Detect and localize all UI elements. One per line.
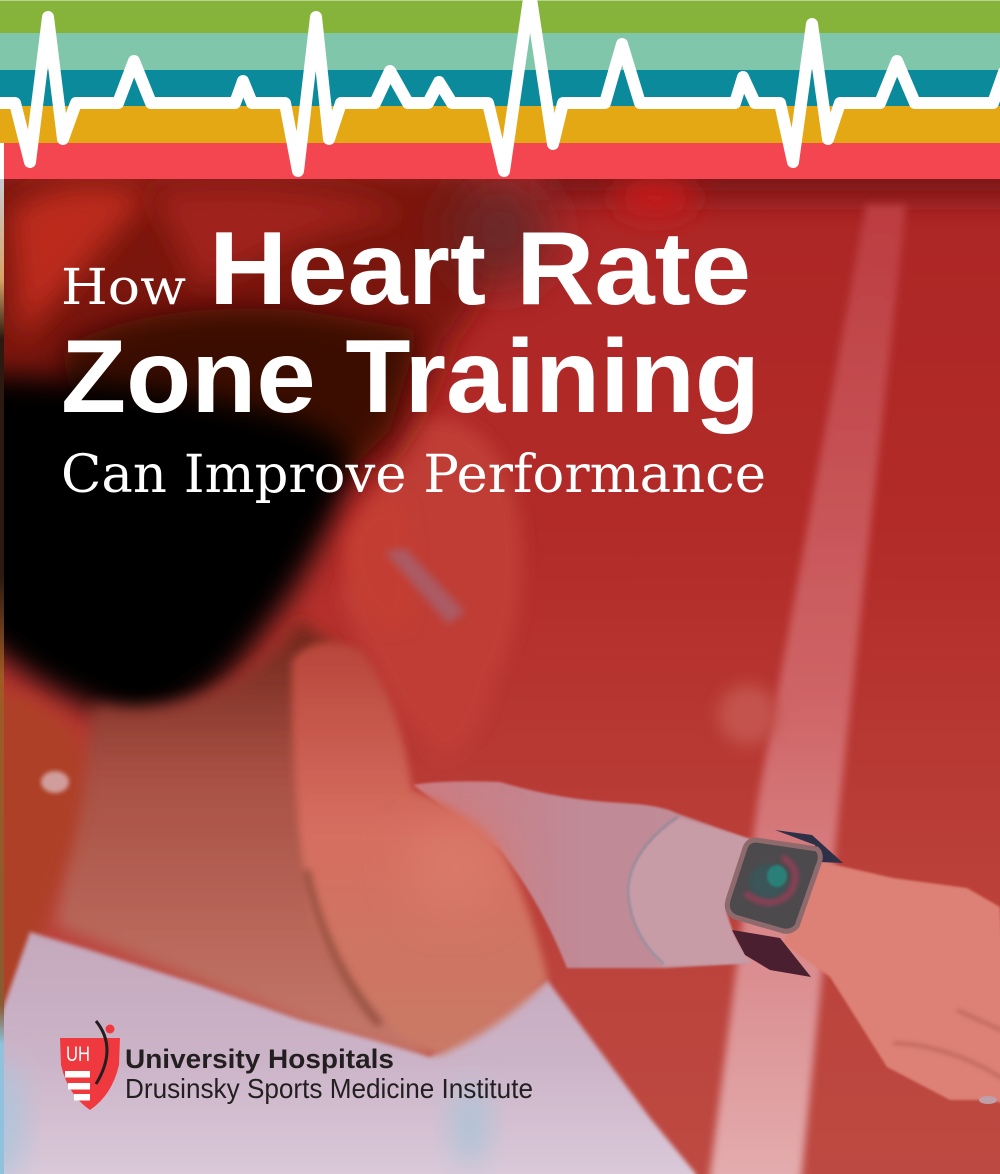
- ear: [345, 498, 414, 630]
- dark hair: [0, 375, 350, 720]
- upper hair: [0, 170, 491, 500]
- title: [61, 211, 766, 505]
- logo wordmark: University Hospitals: [125, 1044, 394, 1074]
- title: How: [61, 258, 186, 316]
- logo wordmark: Drusinsky Sports Medicine Institute: [125, 1073, 533, 1104]
- sleeve cuff: [628, 818, 752, 966]
- shirt: [0, 932, 696, 1174]
- left edge strip: [0, 179, 4, 1174]
- title: Can Improve Performance: [61, 445, 766, 505]
- hand on neck: [292, 642, 548, 1056]
- earbud: [385, 548, 465, 624]
- icon: smartwatch: [727, 830, 843, 977]
- sleeve: [413, 781, 752, 968]
- logo: University Hospitals shield: UH: [66, 1043, 90, 1066]
- logo wordmark: [125, 1044, 533, 1104]
- neck: [55, 620, 430, 1060]
- icon: ECG heartbeat line: [0, 0, 1000, 171]
- icon: hand and wrist with watch: [783, 862, 1000, 1105]
- logo: University Hospitals shield: [60, 1021, 120, 1110]
- heart rate zone colour bands: [0, 0, 1000, 179]
- title: Zone Training: [61, 319, 760, 435]
- left strand of hair: [0, 690, 82, 1030]
- title: Heart Rate: [209, 211, 751, 327]
- face: [340, 417, 522, 760]
